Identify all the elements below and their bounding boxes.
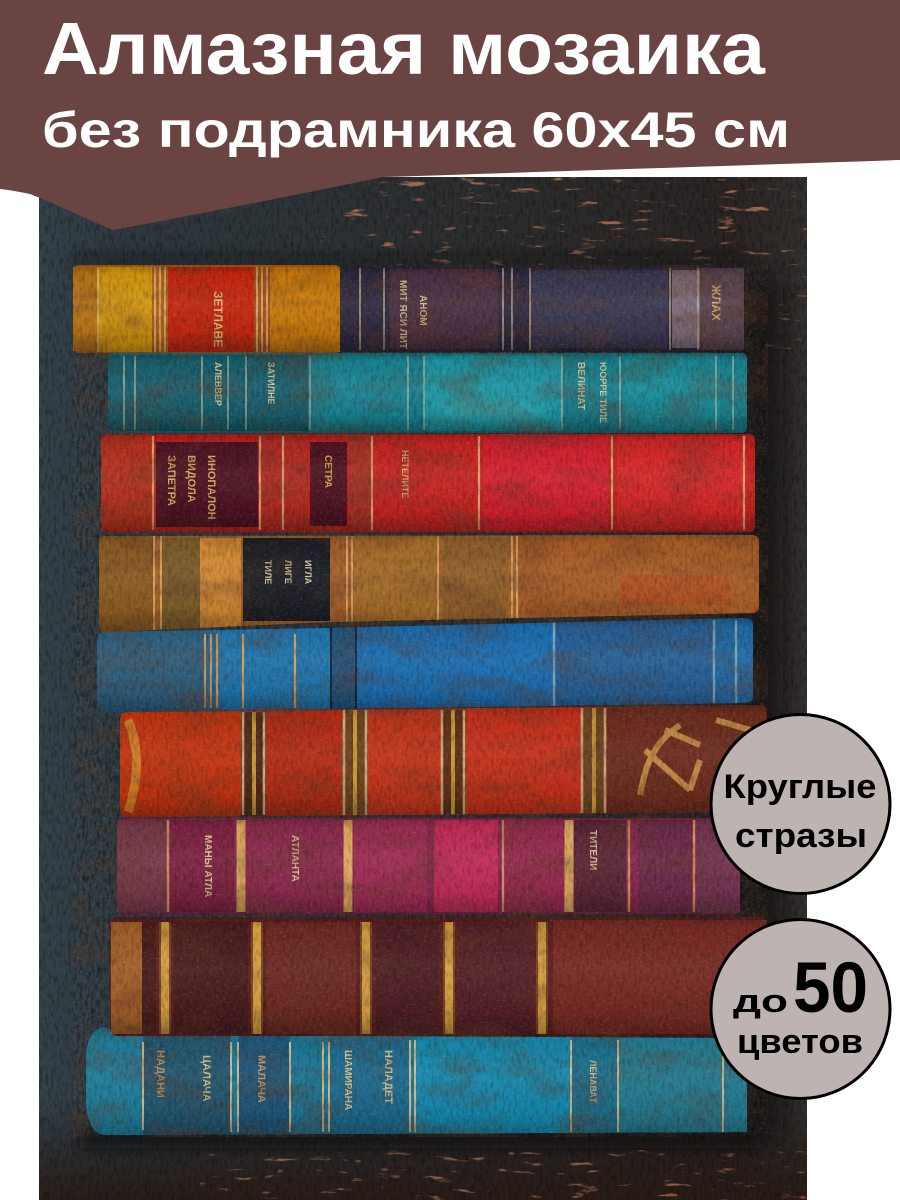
book 3: red: СЕТРА xyxy=(322,455,333,488)
book 6: orange red xyxy=(120,704,770,818)
book 3: red: ИНОПАЛОН xyxy=(205,455,217,520)
book 9: bright blue: ЛЕНАВАТ xyxy=(588,1060,598,1103)
badge: up to 50 colors xyxy=(711,920,890,1098)
book 4: ochre and brown: ЛИГЕ xyxy=(283,560,293,584)
book 9: bright blue: МАЛАЧА xyxy=(255,1055,267,1103)
book 9: bright blue: ШАМИРАНА xyxy=(342,1050,353,1110)
title: Алмазная мозаика xyxy=(42,7,766,90)
book 1 left: orange and red: ЗЕТЛАВЕ xyxy=(211,291,225,347)
book 3: red: ВИДОЛА xyxy=(185,455,197,503)
panel: dark painted background xyxy=(39,177,807,1200)
badge: round rhinestones: Круглые xyxy=(724,768,876,806)
book 1 right: dark purple: МИТ ЯСИ ЛИТ xyxy=(397,280,408,349)
book 4: ochre and brown xyxy=(99,533,761,633)
book 1 right: dark purple: ЖЛАХ xyxy=(709,284,723,321)
book 7: magenta: ТИТЕЛИ xyxy=(587,830,598,870)
book 7: magenta: АТЛАНТА xyxy=(289,835,300,882)
badge: round rhinestones: стразы xyxy=(735,817,867,855)
book 4: ochre and brown: ИГЛА xyxy=(303,560,313,585)
book 9: bright blue: ЦАЛАЧА xyxy=(200,1055,212,1102)
book 7: magenta: МАНЫ АТЛА xyxy=(202,835,213,897)
book 2: teal: ЗАТИЛНЕ xyxy=(266,362,276,404)
book 1 left: orange and red xyxy=(73,265,341,353)
book 9: bright blue xyxy=(86,1027,747,1137)
badge: up to 50 colors: до xyxy=(733,983,788,1019)
book 1 right: dark purple xyxy=(340,267,744,352)
book 2: teal xyxy=(108,353,747,433)
book 7: magenta xyxy=(117,818,740,914)
book 3: red: НЕТЕЛИТЕ xyxy=(400,450,410,498)
book 4: ochre and brown: ТИЛЕ xyxy=(263,560,273,584)
badge: round rhinestones xyxy=(711,714,890,894)
book 2: teal: АЛЕВВЕР xyxy=(213,362,223,406)
badge: up to 50 colors: цветов xyxy=(737,1023,863,1061)
book 2: teal: ЮОРРЕ ТИЛЕ xyxy=(598,362,608,423)
badge: up to 50 colors: 50 xyxy=(793,949,868,1028)
book 8: maroon leather xyxy=(110,917,767,1036)
book 5: blue xyxy=(97,618,756,713)
book 3: red: ЗАПЕТРА xyxy=(165,455,177,506)
book 3: red xyxy=(101,434,755,532)
book 9: bright blue: НАДАНИ xyxy=(154,1050,166,1098)
texture overlay on the books xyxy=(73,265,768,1137)
subtitle: без подрамника 60х45 см xyxy=(42,102,790,158)
header banner xyxy=(0,0,900,230)
book 9: bright blue: НАЛАДЕТ xyxy=(382,1050,394,1104)
book 1 right: dark purple: АНОМ xyxy=(417,295,428,326)
book 2: teal: ВЕЛИНАТ xyxy=(575,362,586,410)
